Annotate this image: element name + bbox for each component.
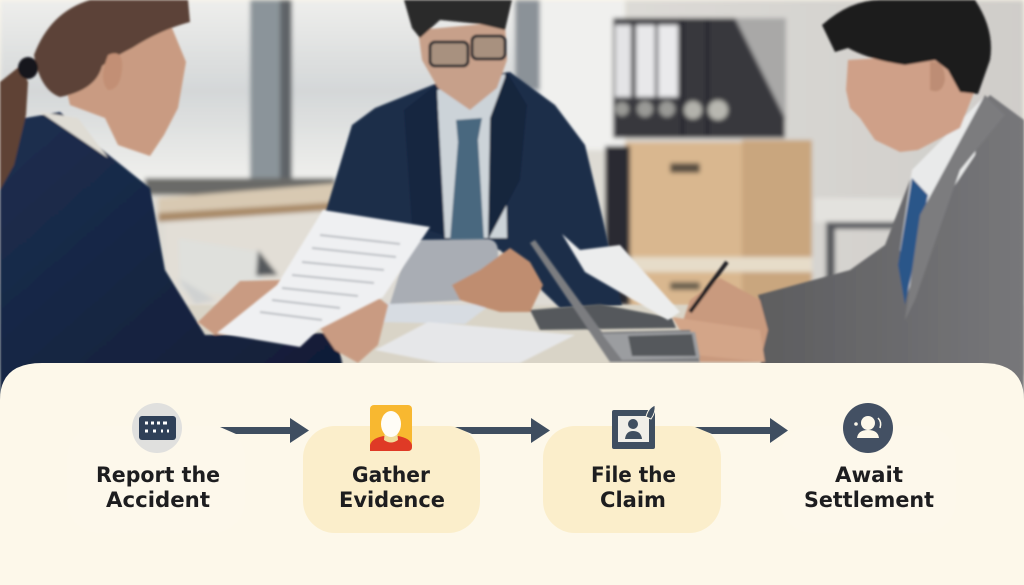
step 3: File the Claim bbox=[543, 405, 721, 533]
label: File the Claim: Claim bbox=[600, 488, 666, 512]
label: Gather Evidence: Gather bbox=[352, 463, 431, 487]
label: Gather Evidence: Evidence bbox=[339, 488, 445, 512]
person: woman in navy bbox=[0, 0, 388, 410]
icon: framed photo with pen bbox=[612, 405, 655, 449]
table bbox=[170, 305, 1024, 375]
step 4: Await Settlement bbox=[780, 403, 956, 533]
arrow: step 1 to 2 bbox=[220, 418, 309, 443]
laptop and paper, foreground bbox=[530, 234, 700, 362]
side table bbox=[814, 198, 904, 282]
step 1: Report the Accident bbox=[67, 403, 245, 533]
label: File the Claim: File the bbox=[591, 463, 676, 487]
label: Gather Evidence bbox=[339, 463, 445, 512]
person: centre man bbox=[325, 0, 622, 308]
label: Await Settlement bbox=[804, 463, 934, 512]
person: man in grey suit bbox=[672, 0, 1024, 410]
label: Report the Accident: Accident bbox=[106, 488, 210, 512]
label: File the Claim bbox=[591, 463, 676, 512]
right wall bbox=[540, 0, 1024, 300]
label: Await Settlement: Await bbox=[835, 463, 903, 487]
panel: process steps bbox=[0, 363, 1024, 585]
step 2: Gather Evidence bbox=[303, 405, 480, 533]
window panes bbox=[0, 0, 542, 195]
arrow: step 3 to 4 bbox=[695, 418, 788, 443]
back laptop bbox=[178, 238, 278, 304]
icon: keyboard bbox=[132, 403, 182, 453]
document held by woman bbox=[217, 210, 430, 347]
chair back bbox=[605, 146, 630, 306]
tablet and papers on table bbox=[375, 239, 676, 363]
icon: person in circle bbox=[843, 403, 893, 453]
photo: office background bbox=[0, 0, 1024, 370]
binders bbox=[613, 18, 786, 138]
label: Await Settlement: Settlement bbox=[804, 488, 934, 512]
label: Report the Accident: Report the bbox=[96, 463, 220, 487]
arrow: step 2 to 3 bbox=[455, 418, 550, 443]
window sill bbox=[158, 183, 340, 320]
label: Report the Accident bbox=[96, 463, 220, 512]
icon: person on yellow tile bbox=[370, 405, 412, 451]
cardboard boxes bbox=[625, 140, 812, 307]
